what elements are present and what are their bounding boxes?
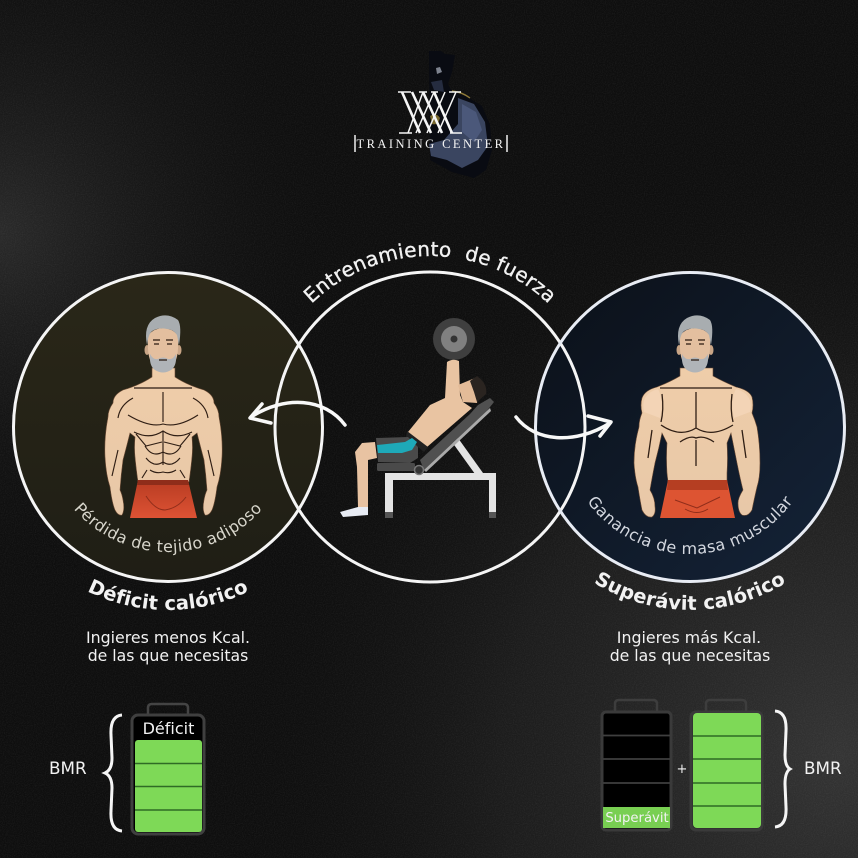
arrow: to surplus (516, 416, 611, 438)
bench (377, 398, 496, 518)
text: deficit description line 2: de las que necesitas (88, 646, 248, 665)
head (676, 315, 714, 372)
icon: bench press athlete (340, 318, 496, 518)
logo bars (355, 135, 507, 152)
icon: panther mascot (429, 51, 492, 178)
logo (355, 51, 507, 178)
plus sign: + (677, 762, 687, 777)
text: surplus description: Ingieres más Kcal. (617, 628, 761, 647)
head (144, 315, 182, 372)
battery: surplus (602, 700, 671, 830)
label: BMR left: BMR (49, 758, 87, 778)
logo text: TRAINING CENTER (357, 137, 505, 151)
figure: lean man (105, 315, 222, 518)
athlete (340, 360, 486, 517)
battery: deficit (132, 704, 204, 834)
label: Pérdida de tejido adiposo: Pérdida de tejido adiposo (74, 502, 260, 556)
label: BMR right: BMR (804, 758, 842, 778)
text: surplus description line 2: de las que necesitas (610, 646, 770, 665)
heading: Entrenamiento de fuerza: Entrenamiento de fuerza (302, 242, 554, 303)
circle outlines (14, 272, 844, 582)
arrow: to deficit (250, 402, 345, 425)
icon: WM monogram (398, 92, 462, 133)
brace: right (775, 711, 790, 827)
panel: right circle (536, 273, 844, 581)
label: Ganancia de masa muscular: Ganancia de masa muscular (589, 496, 791, 554)
text: deficit description: Ingieres menos Kcal. (86, 628, 250, 647)
panel: left circle (14, 273, 322, 581)
brace: left (105, 715, 122, 831)
battery: BMR full (691, 700, 762, 830)
heading: Superávit calórico: Superávit calórico (595, 572, 784, 610)
heading: Déficit calórico: Déficit calórico (88, 579, 247, 610)
battery label: Superávit (605, 810, 669, 826)
figure: muscular man (634, 315, 760, 518)
battery label: Déficit (143, 719, 194, 738)
barbell (433, 318, 475, 360)
